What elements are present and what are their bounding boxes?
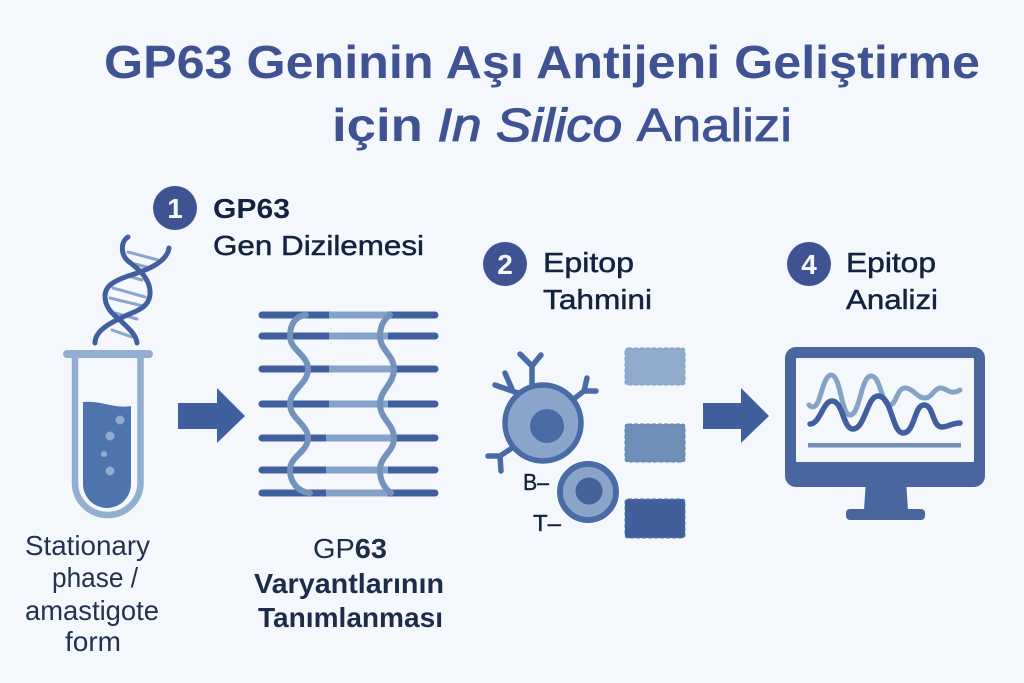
step 2 heading: Tahmini: [543, 284, 652, 315]
wavy connectors: [290, 315, 394, 493]
icon: test tube: [63, 350, 153, 515]
step 1 heading: 1: [167, 193, 183, 224]
title: GP63 Geninin Aşı Antijeni Geliştirme: [104, 36, 980, 88]
caption: stationary phase: amastigote: [25, 595, 159, 626]
icon: monitor with curves: [785, 347, 985, 520]
icon: DNA helix: [95, 237, 169, 343]
dark sequence bars: [262, 315, 435, 493]
icon: immune cells: T–: [533, 510, 561, 536]
step 2 heading: 2: [497, 249, 513, 280]
receptors: [488, 354, 596, 471]
step 2 heading: Epitop: [543, 247, 634, 278]
cell labels: B–: [523, 469, 549, 495]
arrow 2: [703, 388, 769, 443]
title: için In Silico Analizi: [332, 99, 792, 151]
caption: stationary phase: Stationary: [25, 530, 150, 561]
arrow 1: [178, 388, 245, 443]
light variant segments: [326, 315, 392, 493]
step 4 heading: 4: [801, 249, 817, 280]
caption: variants: Varyantlarının: [254, 568, 444, 599]
gene variants alignment: [262, 315, 435, 493]
caption: variants: [254, 533, 444, 633]
step 4 heading: Epitop: [846, 247, 936, 278]
small cell: [560, 464, 616, 520]
step 4 heading: Analizi: [846, 284, 938, 315]
step 1 heading: GP63: [213, 193, 290, 224]
title: [104, 36, 980, 151]
step 1 heading: Gen Dizilemesi: [213, 230, 424, 261]
epitope blocks: [625, 348, 685, 538]
step 1 heading: [153, 186, 424, 261]
caption: stationary phase: form: [65, 626, 121, 657]
caption: variants: Tanımlanması: [258, 602, 443, 633]
caption: stationary phase: [25, 530, 159, 657]
large cell: [505, 385, 581, 461]
icon: immune cells: [488, 354, 616, 536]
caption: variants: GP63: [313, 533, 387, 564]
step 4 heading: [787, 242, 938, 315]
step 2 heading: [483, 242, 652, 315]
caption: stationary phase: phase /: [52, 562, 138, 593]
